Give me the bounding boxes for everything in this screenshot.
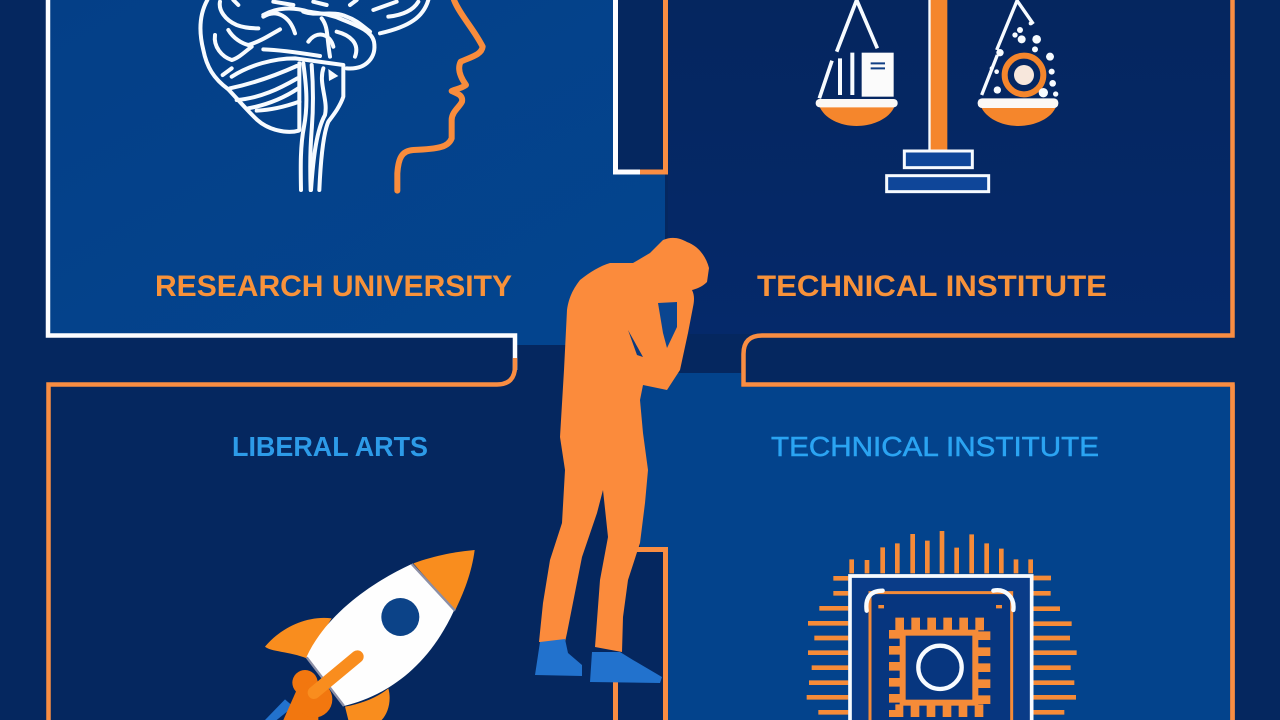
pole [928, 0, 931, 150]
orange bar [314, 657, 357, 693]
gear [895, 624, 984, 711]
panel: top right technical institute [668, 0, 1232, 720]
face profile [397, 0, 483, 191]
title: research university: RESEARCH UNIVERSITY [155, 270, 512, 303]
chip body [850, 576, 1032, 720]
play-like mark in the brain stem [328, 69, 338, 81]
icon: circuit chip with gear [807, 531, 1077, 720]
left pan [816, 0, 898, 126]
title: technical institute orange: TECHNICAL INSTITUTE [757, 270, 1107, 303]
icon: brain and head profile [200, 0, 483, 191]
title: liberal arts: LIBERAL ARTS [232, 431, 428, 462]
panel: liberal arts [48, 358, 615, 720]
inner frame [870, 593, 1012, 720]
exhaust [265, 699, 293, 720]
icon: balance scale [816, 0, 1058, 192]
figure: worried person silhouette [535, 238, 709, 683]
panel: lower technical institute [616, 373, 1232, 720]
nose cone [413, 550, 475, 611]
right pan [978, 0, 1058, 126]
pins [807, 531, 1077, 712]
icon: rocket [265, 550, 475, 720]
gap between arm and face [658, 302, 677, 348]
panel: research university [48, 0, 666, 370]
fins [265, 618, 332, 658]
arm crease [628, 330, 643, 357]
window [381, 598, 419, 636]
body [307, 564, 454, 706]
brain outline [200, 0, 428, 190]
shoes [535, 639, 582, 676]
title: technical institute blue: TECHNICAL INSTITUTE [771, 431, 1099, 462]
base [904, 151, 972, 168]
